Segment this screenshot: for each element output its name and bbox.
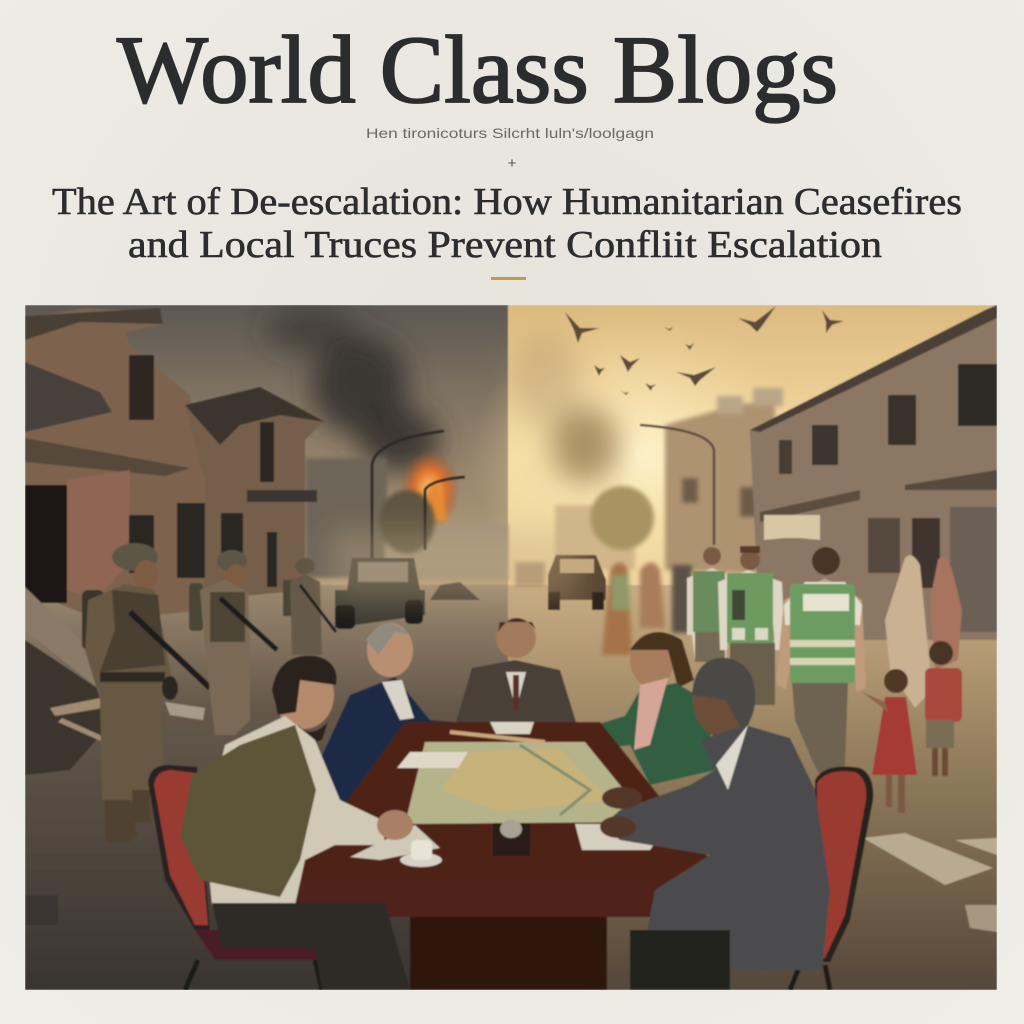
distant buildings left (305, 458, 508, 580)
soldier far (283, 558, 336, 655)
illustration panel (25, 305, 997, 990)
horizon haze (330, 530, 580, 600)
right ground (508, 585, 997, 990)
distant crowd right (515, 562, 692, 655)
backpack (82, 590, 104, 650)
plus ornament: + (508, 155, 517, 172)
street lamp right (640, 425, 714, 545)
left conflict sky (25, 305, 508, 605)
ruined building left (25, 308, 210, 620)
aid worker foreground (776, 547, 866, 790)
man with tactical vest (180, 656, 413, 990)
smoke plume left (265, 308, 440, 472)
man in grey suit (600, 658, 830, 990)
aid worker centre (718, 546, 785, 705)
right main building (750, 305, 997, 640)
right building far (555, 388, 783, 575)
papers on table (397, 752, 468, 768)
left military truck (335, 558, 425, 629)
desk item (493, 823, 530, 856)
child in red dress (862, 669, 917, 813)
headline (52, 181, 962, 266)
subtitle: Hen tironicoturs Silcrht luln's/loolgagn (366, 125, 654, 141)
soldier middle (189, 550, 277, 735)
birds (565, 306, 844, 395)
headline: The Art of De-escalation: How Humanitarian Ceasefires (52, 181, 962, 223)
fire (402, 452, 458, 525)
woman in green (600, 631, 716, 786)
second ruined building (185, 387, 325, 600)
soldier foreground (82, 543, 210, 843)
gold divider (491, 277, 526, 280)
map (405, 742, 650, 824)
scattered papers (863, 833, 997, 932)
right peaceful sky (508, 305, 997, 605)
seated man navy suit (322, 622, 451, 802)
right red chair (790, 766, 873, 990)
aid worker rear (687, 547, 728, 662)
child in red shirt (925, 641, 962, 776)
right truck (548, 555, 606, 610)
left red chair (148, 765, 325, 990)
women in robes right (885, 555, 962, 708)
rubble (25, 582, 480, 925)
table (288, 722, 728, 990)
left ground (25, 585, 508, 990)
sun glow (484, 352, 720, 532)
coffee cup (400, 853, 442, 867)
smoke plume right (509, 335, 619, 483)
handshake pen (450, 732, 545, 742)
headline: and Local Truces Prevent Confliit Escalation (128, 224, 882, 266)
title: World Class Blogs (117, 16, 838, 123)
street lamps left (372, 431, 465, 560)
seated man centre (456, 618, 576, 722)
